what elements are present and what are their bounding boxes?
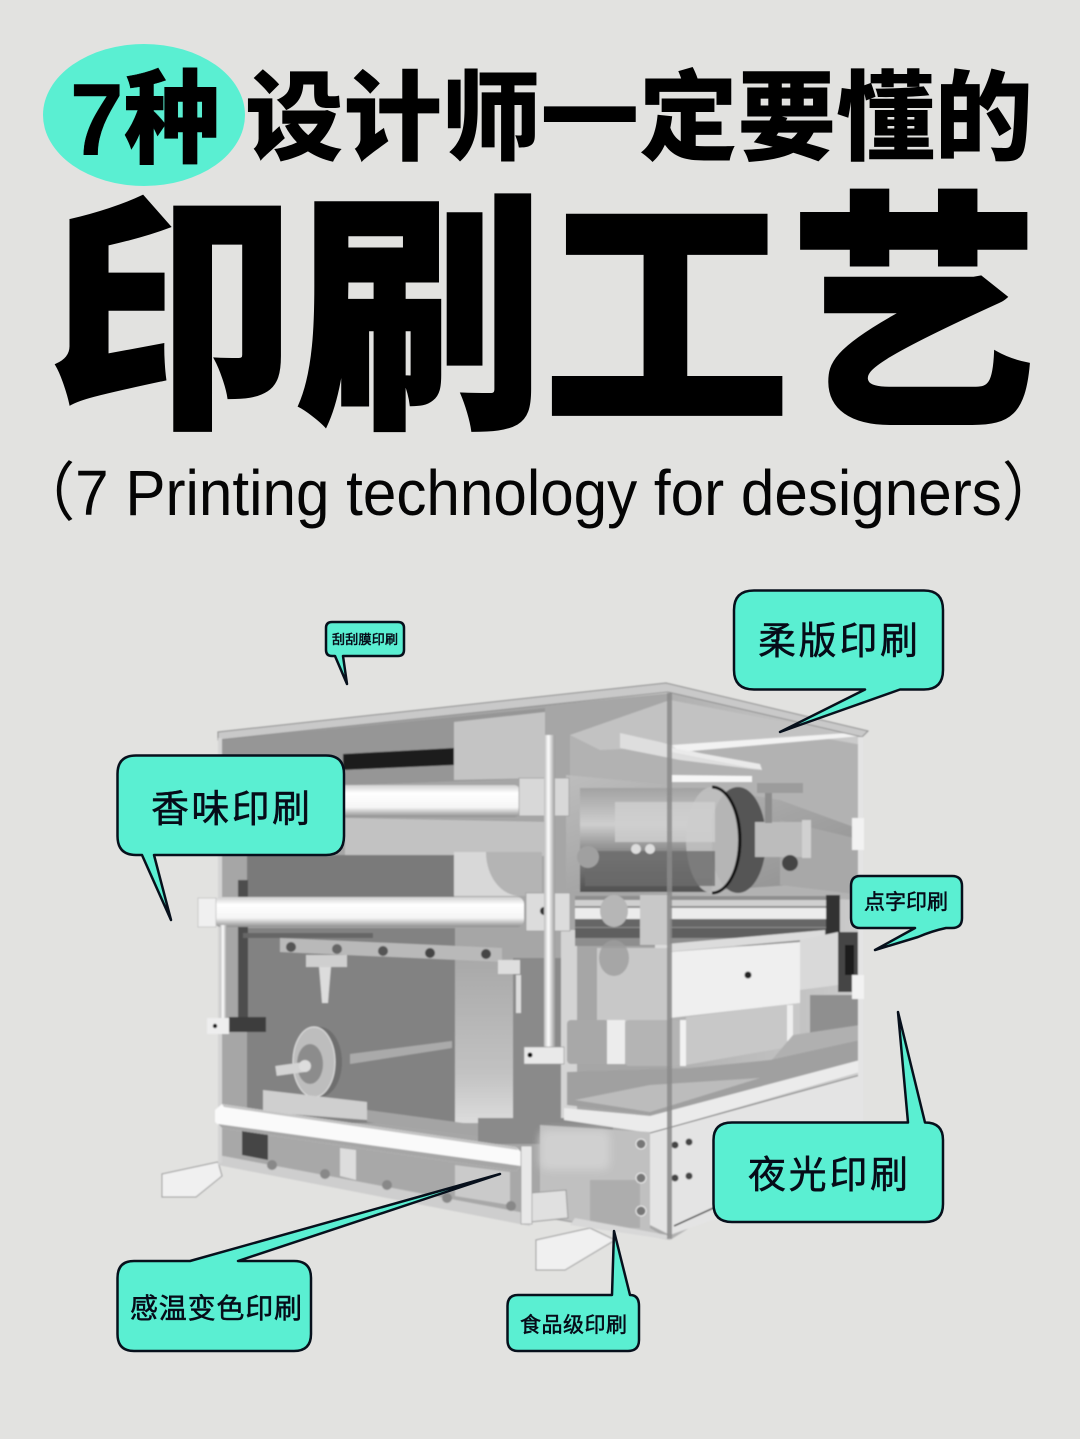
pulley wheel xyxy=(275,1027,452,1097)
bottom roller end post xyxy=(521,1146,532,1224)
black strip xyxy=(343,748,454,770)
front acrylic edge xyxy=(667,693,672,1239)
rod clamp block xyxy=(524,1047,564,1064)
drum cylinder xyxy=(577,787,766,893)
bracket bar with bolts xyxy=(243,933,502,962)
callout: 夜光印刷 xyxy=(714,1012,943,1222)
callout: 夜光印刷: 夜光印刷 xyxy=(748,1155,908,1197)
toothed rack xyxy=(263,1090,367,1120)
bottom edge rail with bolts xyxy=(218,1155,530,1226)
vertical guide rod xyxy=(544,735,555,1055)
floor of lower bay xyxy=(567,1040,860,1115)
callout: 食品级印刷: 食品级印刷 xyxy=(520,1314,627,1337)
middle roller end blocks xyxy=(198,893,570,931)
light panel under top roller xyxy=(345,818,550,858)
left guide rod xyxy=(220,925,227,1020)
back upper band xyxy=(218,708,545,790)
middle roller xyxy=(214,897,524,927)
lower roller and rods right xyxy=(575,895,840,953)
callout: 刮刮膜印刷 xyxy=(326,622,404,684)
headline line one: 设计师一定要懂的: 设计师一定要懂的 xyxy=(245,63,1033,173)
right edge of enclosure xyxy=(852,737,864,1122)
right foot xyxy=(536,1228,615,1270)
top roller end block xyxy=(519,778,569,816)
lower legs and bay xyxy=(567,995,860,1066)
right face of enclosure xyxy=(670,693,862,1240)
callout: 香味印刷 xyxy=(118,756,344,920)
top roller xyxy=(340,785,520,817)
callout: 柔版印刷: 柔版印刷 xyxy=(758,621,918,663)
left face of enclosure xyxy=(218,693,670,1240)
callout: 柔版印刷 xyxy=(734,590,943,732)
callout: 刮刮膜印刷: 刮刮膜印刷 xyxy=(332,632,398,647)
diagonal gray band behind drum xyxy=(566,775,862,890)
mint ellipse highlight xyxy=(43,44,245,186)
drive motor xyxy=(755,783,811,871)
platform front face xyxy=(650,1074,940,1235)
hinge plate xyxy=(530,1190,568,1222)
callout: 食品级印刷 xyxy=(508,1231,639,1351)
front corner bracket with bolts xyxy=(540,1125,692,1240)
carriage end block xyxy=(800,932,838,990)
lower strip xyxy=(367,1110,478,1136)
left clamp block xyxy=(207,1017,266,1034)
main heading: 印刷工艺: 印刷工艺 xyxy=(49,177,1037,461)
lower transparent section xyxy=(218,1125,530,1225)
second nozzle xyxy=(498,960,521,1013)
callout: 点字印刷: 点字印刷 xyxy=(864,891,948,914)
headline line one: 7种: 7种 xyxy=(70,63,220,177)
callout: 感温变色印刷 xyxy=(118,1174,500,1351)
bottom roller xyxy=(215,1104,521,1171)
gear housing xyxy=(597,895,670,1023)
dispensing nozzle xyxy=(306,955,347,1003)
callout: 点字印刷 xyxy=(851,876,962,950)
top acrylic plate xyxy=(218,683,868,740)
callout: 香味印刷: 香味印刷 xyxy=(151,789,310,831)
white platform lip xyxy=(564,1060,860,1133)
translucent lighter panel xyxy=(455,958,513,1123)
dark upper panel xyxy=(247,855,454,900)
circular light part xyxy=(454,852,542,896)
white carriage block xyxy=(670,942,800,1018)
callout: 感温变色印刷: 感温变色印刷 xyxy=(130,1293,302,1324)
left foot xyxy=(162,1162,222,1197)
machine illustration xyxy=(162,683,940,1270)
title block xyxy=(43,44,1037,461)
lower dark panel xyxy=(247,928,455,1123)
upper right interior xyxy=(570,710,862,900)
left edge of enclosure xyxy=(218,738,222,1163)
